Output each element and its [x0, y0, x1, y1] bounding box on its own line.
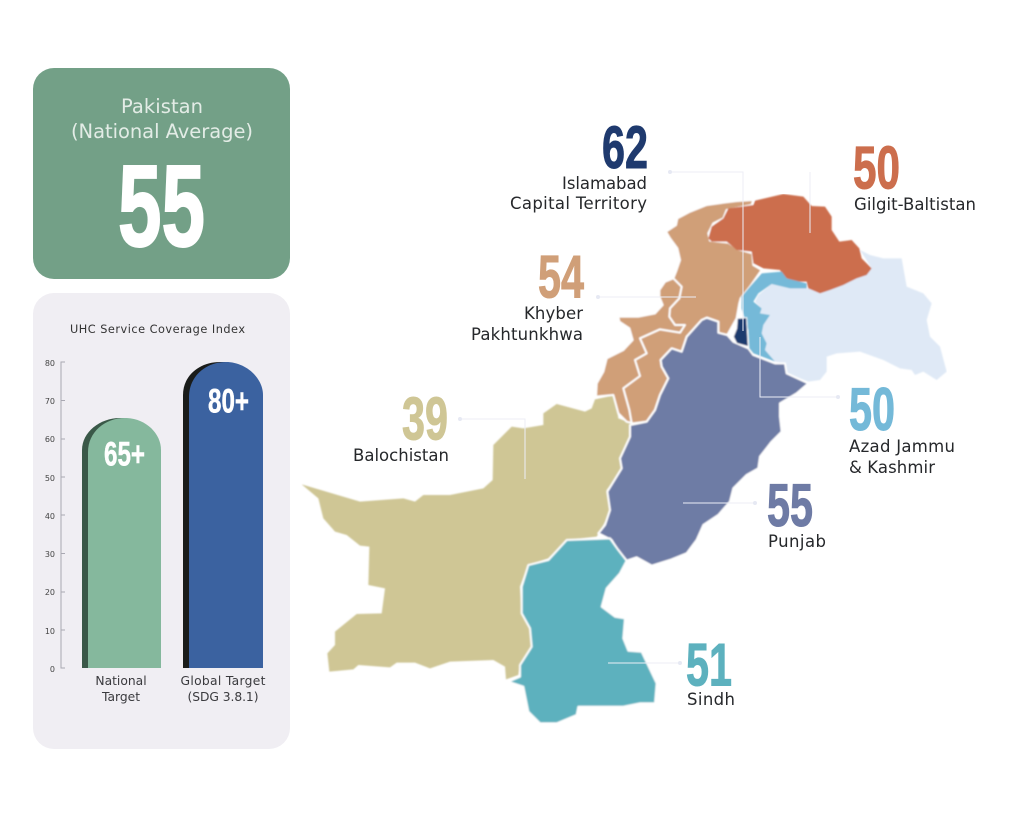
region: Gilgit-Baltistan — [708, 194, 872, 293]
region: Punjab — [598, 318, 808, 566]
panel: UHC chart — [33, 293, 290, 749]
region: Sindh — [508, 538, 657, 723]
national average heading — [71, 95, 253, 143]
region: Indian-administered Kashmir area — [755, 250, 947, 382]
label: Sindh: 51 — [686, 632, 732, 698]
label: Islamabad Capital Territory: Islamabad — [562, 174, 647, 193]
label: Sindh: Sindh — [687, 690, 735, 709]
label: Balochistan: 39 — [402, 386, 448, 452]
label: Azad Jammu and Kashmir: Azad Jammu — [849, 437, 955, 456]
bar: national target — [82, 418, 161, 668]
y axis: 0 — [50, 665, 55, 674]
y axis: 80 — [45, 359, 55, 368]
label: Gilgit-Baltistan: Gilgit-Baltistan — [854, 195, 976, 214]
chart title: UHC Service Coverage Index — [70, 323, 245, 336]
bar labels: Global Target — [180, 674, 266, 688]
label: Gilgit-Baltistan — [853, 134, 976, 214]
label: Khyber Pakhtunkhwa: 54 — [538, 244, 584, 310]
y axis: 70 — [45, 397, 55, 406]
region: Khyber Pakhtunkhwa — [596, 200, 762, 423]
label: Islamabad Capital Territory — [510, 114, 648, 213]
bar: global target: 80+ — [208, 382, 249, 420]
label: Sindh — [686, 632, 735, 709]
bar: national target: 65+ — [104, 436, 145, 474]
leader lines — [458, 170, 840, 665]
y axis: 30 — [45, 550, 55, 559]
national average value: 55 — [118, 141, 205, 271]
national average heading: Pakistan — [121, 95, 203, 118]
label: Islamabad Capital Territory: 62 — [602, 114, 648, 181]
label: Balochistan — [353, 386, 449, 465]
label: Gilgit-Baltistan: 50 — [853, 134, 900, 202]
national average heading: (National Average) — [71, 120, 253, 143]
label: Azad Jammu and Kashmir: & Kashmir — [849, 458, 935, 477]
y axis: 10 — [45, 627, 55, 636]
label: Islamabad Capital Territory: Capital Territory — [510, 194, 647, 213]
y axis: 50 — [45, 474, 55, 483]
region: Azad Jammu and Kashmir — [742, 272, 807, 362]
y axis: 60 — [45, 435, 55, 444]
bar labels: (SDG 3.8.1) — [188, 690, 258, 704]
bar labels: National — [95, 674, 147, 688]
region: Balochistan — [302, 395, 632, 679]
y axis: 40 — [45, 512, 55, 521]
label: Khyber Pakhtunkhwa: Khyber — [524, 304, 583, 323]
label: Punjab: Punjab — [768, 532, 826, 551]
label: Balochistan: Balochistan — [353, 446, 449, 465]
bar labels: Target — [101, 690, 140, 704]
label: Khyber Pakhtunkhwa: Pakhtunkhwa — [471, 325, 583, 344]
map of Pakistan — [302, 194, 947, 723]
region: Islamabad Capital Territory — [733, 318, 748, 347]
bar labels — [95, 674, 266, 704]
panel: national average — [33, 68, 290, 279]
y axis: 20 — [45, 588, 55, 597]
label: Azad Jammu and Kashmir: 50 — [849, 376, 895, 443]
label: Azad Jammu and Kashmir — [849, 376, 955, 477]
label: Punjab: 55 — [767, 472, 813, 539]
label: Khyber Pakhtunkhwa — [471, 244, 584, 344]
y axis — [45, 359, 65, 674]
bar: global target — [183, 362, 263, 668]
